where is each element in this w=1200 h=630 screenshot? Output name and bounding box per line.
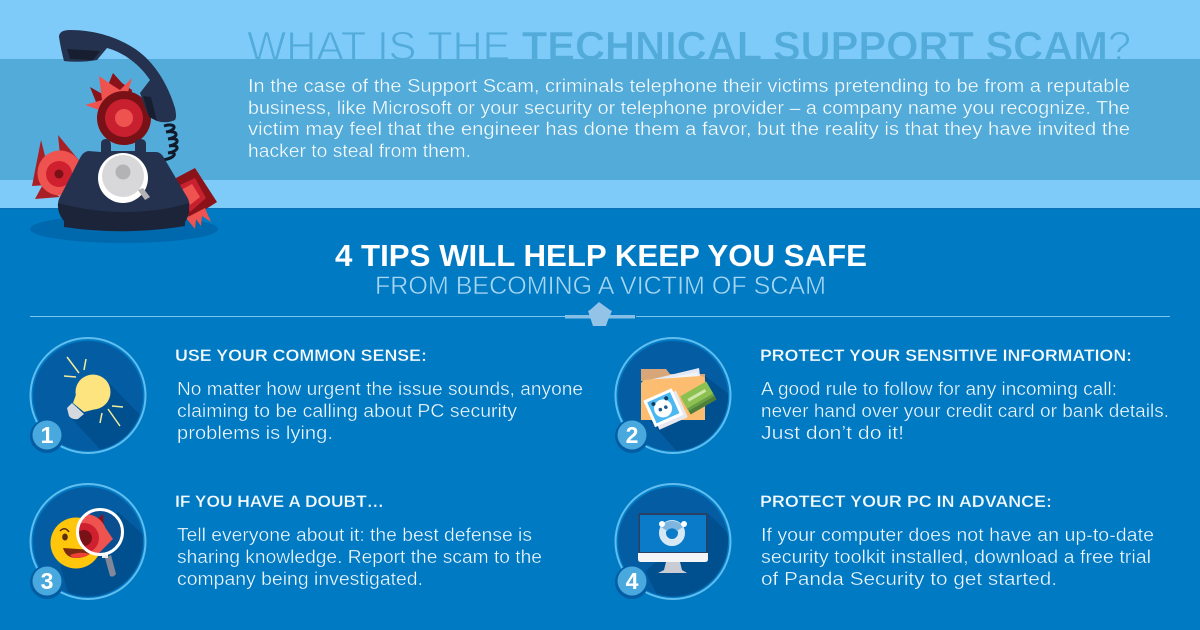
tip 4 heading: PROTECT YOUR PC IN ADVANCE: xyxy=(760,493,1052,511)
tip 4 body: security toolkit installed, download a free trial xyxy=(761,547,1151,567)
tip 4 body xyxy=(761,525,1154,589)
tip 4 icon: monitor with panda logo xyxy=(614,483,732,600)
title: WHAT IS THE TECHNICAL SUPPORT SCAM? xyxy=(247,23,1131,69)
money xyxy=(680,381,717,415)
tip 3 number badge xyxy=(30,565,64,599)
tip 3 body: company being investigated. xyxy=(177,569,423,589)
rays xyxy=(64,357,123,426)
heading: 4 TIPS WILL HELP KEEP YOU SAFE xyxy=(335,238,867,273)
tip 3 body: Tell everyone about it: the best defense is xyxy=(177,525,532,545)
subheading: FROM BECOMING A VICTIM OF SCAM xyxy=(375,272,826,300)
background: top light band xyxy=(0,0,1200,209)
telephone base xyxy=(58,139,189,214)
intro text: In the case of the Support Scam, criminals telephone their victims pretending to be from a reputable xyxy=(248,75,1130,96)
tip 2 body: A good rule to follow for any incoming call: xyxy=(761,379,1117,399)
panda logo xyxy=(659,521,687,542)
intro text: hacker to steal from them. xyxy=(248,140,471,161)
tip 1 body: No matter how urgent the issue sounds, anyone xyxy=(177,379,583,399)
intro band xyxy=(0,59,1200,180)
tip 4 body: of Panda Security to get started. xyxy=(761,569,1057,589)
tip 4 number badge: 4 xyxy=(626,568,639,594)
telephone dial xyxy=(98,153,150,203)
telephone cord xyxy=(163,125,177,160)
tip 2 body xyxy=(761,379,1169,443)
tip 3 heading: IF YOU HAVE A DOUBT… xyxy=(175,493,384,511)
background: main blue area xyxy=(0,209,1200,630)
tip 3 icon: emoji with magnifier xyxy=(30,483,146,600)
bezel and stand xyxy=(638,553,708,562)
tip 3 body: sharing knowledge. Report the scam to the xyxy=(177,547,542,567)
screen xyxy=(638,513,708,554)
intro text: victim may feel that the engineer has done them a favor, but the reality is that they have invited the xyxy=(248,118,1130,139)
tip 1 body xyxy=(177,379,583,443)
emoji face xyxy=(50,518,102,568)
tip 2 body: Just don’t do it! xyxy=(761,423,904,443)
photo with panda xyxy=(643,387,688,431)
tip 4 number badge xyxy=(615,565,649,599)
upper red target with spikes xyxy=(85,73,151,145)
icon: telephone under attack xyxy=(30,30,218,243)
divider with ornament xyxy=(30,302,1170,326)
tip 2 number badge xyxy=(615,419,649,453)
tip 1 heading: USE YOUR COMMON SENSE: xyxy=(175,347,427,365)
tip 4 body: If your computer does not have an up-to-date xyxy=(761,525,1154,545)
intro text xyxy=(248,75,1130,161)
tip 2 icon: folder with credentials xyxy=(616,338,730,455)
folder xyxy=(641,369,705,381)
tip 1 number badge xyxy=(30,419,64,453)
left red target with spikes xyxy=(32,135,82,199)
right red diamond xyxy=(176,168,217,229)
tip 3 body xyxy=(177,525,542,589)
tip 3 number badge: 3 xyxy=(41,568,53,594)
intro text: business, like Microsoft or your security or telephone provider – a company name you recognize. The xyxy=(248,97,1130,118)
tip 1 body: claiming to be calling about PC security xyxy=(177,401,517,421)
tip 1 number badge: 1 xyxy=(41,422,54,448)
tip 1 body: problems is lying. xyxy=(177,423,333,443)
magnifier xyxy=(76,508,124,577)
bulb xyxy=(67,374,110,419)
tip 2 number badge: 2 xyxy=(626,422,638,448)
tip 1 icon: light bulb xyxy=(30,338,150,460)
tip 2 heading: PROTECT YOUR SENSITIVE INFORMATION: xyxy=(760,347,1132,365)
tip 2 body: never hand over your credit card or bank details. xyxy=(761,401,1169,421)
telephone handset xyxy=(59,30,176,122)
